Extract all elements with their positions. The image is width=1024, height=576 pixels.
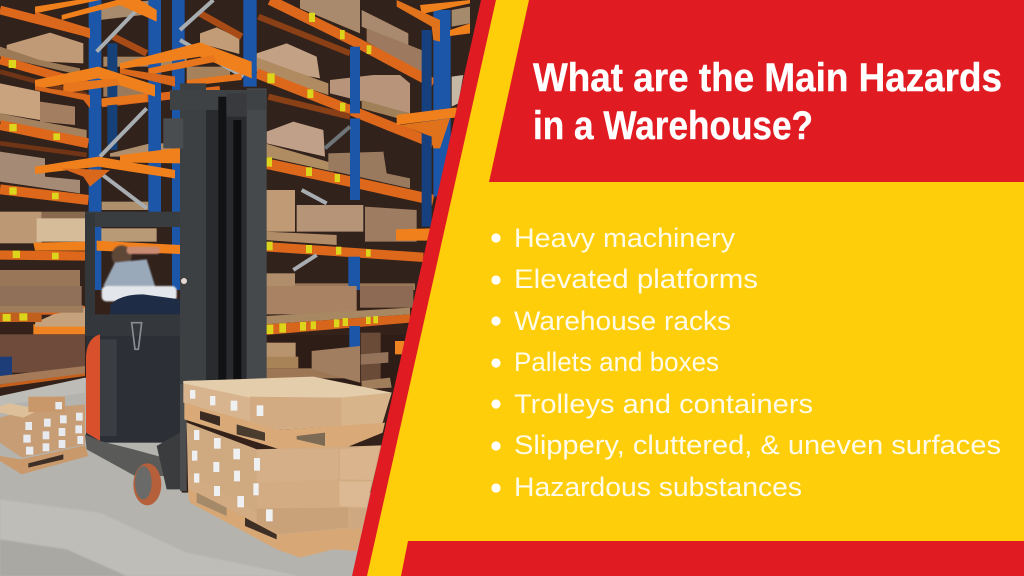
forklift body	[85, 294, 187, 505]
orange shelf beams	[0, 0, 433, 257]
overhead guard	[85, 212, 180, 320]
title: in a Warehouse?	[533, 104, 813, 148]
item: slippery surfaces: Slippery, cluttered, & uneven surfaces	[514, 430, 1001, 460]
orange cantilever arms	[33, 0, 470, 254]
item: elevated platforms: Elevated platforms	[514, 264, 758, 294]
concrete floor	[0, 378, 417, 576]
warehouse racking lower	[0, 286, 417, 576]
forklift mast	[163, 83, 267, 420]
yellow content panel	[367, 0, 1024, 576]
item: heavy machinery: Heavy machinery	[514, 223, 736, 253]
title	[533, 56, 1002, 148]
red diagonal stripe	[352, 0, 1024, 576]
photo: warehouse racks and forklift	[0, 0, 500, 576]
grey diagonal braces	[97, 0, 350, 270]
blue uprights	[89, 0, 451, 290]
hazards list	[491, 223, 1001, 502]
yellow shelf labels	[9, 13, 371, 259]
item: warehouse racks: Warehouse racks	[514, 306, 731, 336]
floor pallet of boxes	[0, 397, 88, 474]
operator	[102, 245, 177, 301]
item: pallets and boxes: Pallets and boxes	[514, 347, 719, 377]
item: trolleys and containers: Trolleys and containers	[514, 389, 813, 419]
carton labels	[190, 390, 273, 521]
item: hazardous substances: Hazardous substances	[514, 472, 802, 502]
warehouse racking upper	[0, 0, 500, 290]
forklift	[0, 83, 392, 558]
bottom red band	[401, 541, 1024, 576]
pallet load on forks	[183, 377, 392, 558]
boxes upper	[0, 0, 470, 290]
red title panel	[489, 0, 1024, 182]
